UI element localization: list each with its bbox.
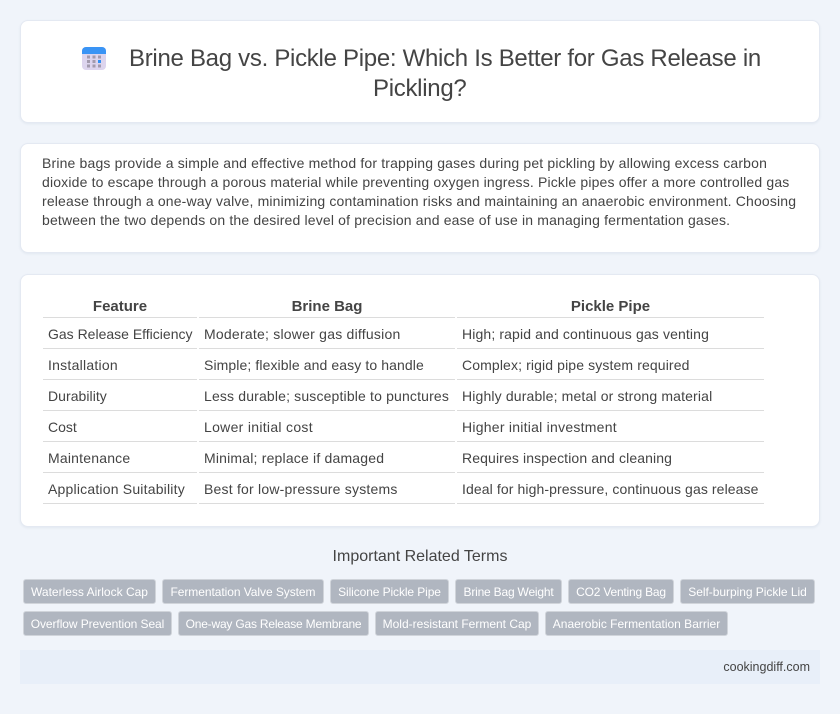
- row: maintenance: Maintenance: [48, 450, 130, 466]
- table header: Pickle Pipe: [571, 298, 650, 315]
- tags: related terms: Overflow Prevention Seal: [31, 617, 164, 631]
- tags: related terms: One-way Gas Release Membrane: [186, 617, 361, 631]
- text block: introduction: release through a one-way valve, minimizing contamination risks and maintaining an anaerobic environment. Choosing: [42, 193, 796, 209]
- icon: calendar: [82, 47, 106, 70]
- row: installation: Simple; flexible and easy to handle: [204, 357, 424, 373]
- title: [129, 45, 761, 102]
- row: gas release efficiency: Moderate; slower gas diffusion: [204, 326, 401, 342]
- row: maintenance: [48, 450, 672, 466]
- table header: Brine Bag: [292, 298, 362, 315]
- row: gas release efficiency: Gas Release Efficiency: [48, 326, 192, 342]
- tags: related terms: Anaerobic Fermentation Barrier: [553, 617, 720, 631]
- row: application suitability: Ideal for high-pressure, continuous gas release: [462, 481, 759, 497]
- table header: Feature: [93, 298, 147, 315]
- tags: related terms: Mold-resistant Ferment Cap: [383, 617, 531, 631]
- table header: [93, 298, 650, 315]
- tags: related terms: Fermentation Valve System: [170, 585, 316, 599]
- row: installation: Complex; rigid pipe system required: [462, 357, 690, 373]
- heading: important related terms: Important Related Terms: [333, 548, 507, 565]
- row: durability: [48, 388, 712, 404]
- row: durability: Highly durable; metal or strong material: [462, 388, 712, 404]
- row: application suitability: Best for low-pressure systems: [204, 481, 398, 497]
- row: installation: Installation: [48, 357, 118, 373]
- panel: header: Pickling?: [373, 75, 466, 102]
- tags: related terms: Waterless Airlock Cap: [31, 585, 148, 599]
- row: cost: Lower initial cost: [204, 419, 313, 435]
- row: maintenance: Requires inspection and cleaning: [462, 450, 672, 466]
- row: cost: Cost: [48, 419, 77, 435]
- panel: comparison table: [20, 274, 820, 527]
- tags: related terms: Silicone Pickle Pipe: [338, 585, 441, 599]
- row: durability: Less durable; susceptible to punctures: [204, 388, 449, 404]
- panel: header: [20, 20, 820, 123]
- row: gas release efficiency: High; rapid and continuous gas venting: [462, 326, 709, 342]
- tags: related terms: Self-burping Pickle Lid: [688, 585, 807, 599]
- row: cost: Higher initial investment: [462, 419, 617, 435]
- row: maintenance: Minimal; replace if damaged: [204, 450, 384, 466]
- row: installation: [48, 357, 690, 373]
- text block: introduction: dioxide to escape through a porous material while preventing oxygen ingress. Pickle pipes offer a more controlled gas: [42, 174, 789, 190]
- row: cost: [48, 419, 617, 435]
- text block: introduction: [42, 155, 796, 228]
- footer bar: [20, 650, 820, 684]
- row: durability: Durability: [48, 388, 107, 404]
- row: application suitability: [48, 481, 759, 497]
- footer source text: cookingdiff.com: [723, 660, 810, 674]
- panel: introduction: [20, 143, 820, 253]
- tags: related terms: Brine Bag Weight: [464, 585, 553, 599]
- tags: related terms: CO2 Venting Bag: [576, 585, 666, 599]
- row: gas release efficiency: [48, 326, 709, 342]
- text block: introduction: Brine bags provide a simple and effective method for trapping gases during pet pickling by allowing excess carbon: [42, 155, 767, 171]
- tags: related terms: [23, 579, 815, 636]
- row: application suitability: Application Suitability: [48, 481, 185, 497]
- panel: header: Brine Bag vs. Pickle Pipe: Which Is Better for Gas Release in: [129, 45, 761, 72]
- text block: introduction: between the two depends on the desired level of precision and ease of use in managing fermentation gases.: [42, 212, 730, 228]
